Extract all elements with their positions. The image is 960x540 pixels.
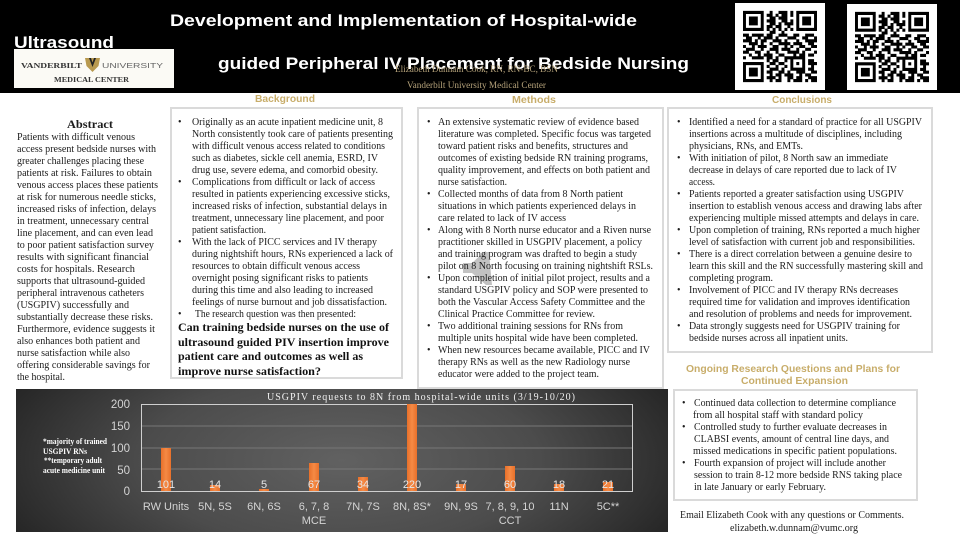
ongoing bullets: in late January or early February. <box>694 482 826 493</box>
affiliation: Vanderbilt University Medical Center <box>407 81 547 91</box>
chart footnote: *majority of trained <box>43 437 107 446</box>
background bullets: With the lack of PICC services and IV therapy <box>192 237 377 248</box>
logo: Vanderbilt University Medical Center: VANDERBILT <box>21 61 82 70</box>
background bullets: • <box>178 177 182 188</box>
plot frame and grid lines <box>141 404 633 492</box>
category labels: MCE <box>302 515 326 527</box>
background bullets: overnight posing significant risks to patients <box>192 273 368 284</box>
conclusions bullets: Patients reported a greater satisfaction using USGPIV <box>689 189 905 200</box>
background bullets: • <box>178 117 182 128</box>
icon: speaker <box>463 252 492 285</box>
abstract text: supports that ultrasound-guided <box>17 276 145 287</box>
conclusions bullets: Data strongly suggests need for USGPIV training for <box>689 321 901 332</box>
background bullets: resulted in patients experiencing excessive sticks, <box>192 189 390 200</box>
abstract text: at risk for numerous needle sticks, <box>17 192 156 203</box>
category labels: 5N, 5S <box>198 501 232 513</box>
conclusions bullets: • <box>677 249 681 260</box>
methods bullets: An extensive systematic review of evidence based <box>438 117 639 128</box>
value labels: 5 <box>261 479 267 491</box>
research question <box>178 320 390 378</box>
research question: improve nurse satisfaction? <box>178 364 321 378</box>
ongoing bullets: • <box>682 458 686 469</box>
conclusions bullets: • <box>677 225 681 236</box>
research question: patient care and outcomes as well as <box>178 349 363 363</box>
methods bullets: toward patient risks and benefits, structures and <box>438 141 628 152</box>
value labels: 14 <box>209 479 221 491</box>
methods bullets <box>427 117 653 380</box>
ongoing bullets: • <box>682 398 686 409</box>
methods bullets: Clinical Practice Committee for review. <box>438 309 595 320</box>
methods bullets: situations in which patients experienced delays in <box>438 201 636 212</box>
background bullets: feelings of nurse burnout and job dissatisfaction. <box>192 297 387 308</box>
y axis labels: 100 <box>111 443 130 455</box>
abstract text <box>17 132 158 383</box>
category labels: 5C** <box>597 501 620 513</box>
conclusions bullets: bedside nurses across all inpatient units. <box>689 333 848 344</box>
QR code 1 <box>735 3 825 90</box>
background bullets: drug use, severe edema, and comorbid obesity. <box>192 165 378 176</box>
methods bullets: therapy RNs as well as the new Radiology nurse <box>438 357 631 368</box>
title <box>14 11 689 73</box>
y axis labels: 0 <box>124 486 130 498</box>
author line: Elizabeth Dunnam Cook, RN, RN-BC, BSN <box>395 65 558 75</box>
methods bullets: • <box>427 225 431 236</box>
methods bullets: nurse satisfaction. <box>438 177 507 188</box>
category labels: 11N <box>549 501 569 513</box>
panel: ongoing research <box>674 390 917 500</box>
abstract text: line placement, and can even lead <box>17 228 153 239</box>
methods bullets: • <box>427 117 431 128</box>
abstract text: greater challenges placing these <box>17 156 145 167</box>
value labels: 18 <box>553 479 565 491</box>
category labels: 7N, 7S <box>346 501 380 513</box>
abstract text: results with significant financial <box>17 252 149 263</box>
value labels: 34 <box>357 479 369 491</box>
abstract text: the hospital. <box>17 372 65 383</box>
contact email: Email Elizabeth Cook with any questions or Comments. <box>680 510 904 521</box>
conclusions bullets <box>677 117 923 344</box>
title: guided Peripheral IV Placement for Bedside Nursing <box>218 54 689 73</box>
conclusions bullets: insertion to establish venous access and drawing labs after <box>689 201 923 212</box>
abstract text: access present bedside nurses with <box>17 144 156 155</box>
category labels: 6, 7, 8 <box>299 501 329 513</box>
y axis labels: 200 <box>111 399 130 411</box>
logo: Vanderbilt University Medical Center: MEDICAL CENTER <box>54 76 130 84</box>
value labels: 220 <box>403 479 421 491</box>
category labels: 8N, 8S* <box>393 501 432 513</box>
contact email <box>680 510 904 534</box>
category labels: 6N, 6S <box>247 501 281 513</box>
conclusions bullets: level of satisfaction with current job and responsibilities. <box>689 237 915 248</box>
value labels: 21 <box>602 479 614 491</box>
value labels: 17 <box>455 479 467 491</box>
heading: Conclusions: Conclusions <box>772 95 832 106</box>
abstract text: increased risks of infection, delays <box>17 204 156 215</box>
background bullets: patient satisfaction. <box>192 225 266 236</box>
methods bullets: • <box>427 189 431 200</box>
ongoing bullets: Continued data collection to determine compliance <box>694 398 897 409</box>
conclusions bullets: access. <box>689 177 715 188</box>
chart footnote: acute medicine unit <box>43 466 105 475</box>
abstract text: peripheral intravenous catheters <box>17 288 144 299</box>
methods bullets: • <box>427 273 431 284</box>
ongoing bullets <box>682 398 903 493</box>
conclusions bullets: completing program. <box>689 273 773 284</box>
conclusions bullets: physicians, RNs, and EMTs. <box>689 141 803 152</box>
methods bullets: practitioner skilled in USGPIV placement, a policy <box>438 237 642 248</box>
background bullets: treatment, unnecessary line placement, and poor <box>192 213 385 224</box>
conclusions bullets: • <box>677 321 681 332</box>
abstract text: to poor patient satisfaction survey <box>17 240 154 251</box>
conclusions bullets: required time for validation and improves identification <box>689 297 910 308</box>
background bullets: such as diabetes, sickle cell anemia, ESRD, IV <box>192 153 379 164</box>
abstract text: substantially decrease these risks. <box>17 312 153 323</box>
y axis labels: 50 <box>117 465 130 477</box>
research question: Can training bedside nurses on the use of <box>178 320 390 334</box>
abstract text: venous access places these patients <box>17 180 158 191</box>
background bullets: with difficult venous access related to conditions <box>192 141 385 152</box>
background bullets: • <box>178 237 182 248</box>
ongoing bullets: CLABSI events, amount of central line days, and <box>694 434 889 445</box>
abstract text: patients at risk. Failures to obtain <box>17 168 152 179</box>
research question: ultrasound guided PIV insertion improve <box>178 335 390 349</box>
methods bullets: Two additional training sessions for RNs from <box>438 321 623 332</box>
methods bullets: multiple units hospital wide have been completed. <box>438 333 638 344</box>
background bullets: Complications from difficult or lack of access <box>192 177 375 188</box>
background bullets <box>178 117 394 320</box>
conclusions bullets: and resolution of problems and needs for improvement. <box>689 309 912 320</box>
value labels <box>157 479 614 491</box>
methods bullets: quality improvement, and effects on both patient and <box>438 165 650 176</box>
conclusions bullets: • <box>677 117 681 128</box>
conclusions bullets: learn this skill and the RN successfully mastering skill and <box>689 261 923 272</box>
background bullets: resources to obtain difficult venous access <box>192 261 360 272</box>
category labels <box>143 501 620 527</box>
methods bullets: Upon completion of initial pilot project, results and a <box>438 273 651 284</box>
heading: Methods: Methods <box>512 95 556 106</box>
panel: conclusions <box>668 108 932 352</box>
methods bullets: When new resources became available, PICC and IV <box>438 345 651 356</box>
methods bullets: and training program was drafted to begin a study <box>438 249 637 260</box>
conclusions bullets: • <box>677 153 681 164</box>
methods bullets: care related to lack of IV access <box>438 213 566 224</box>
methods bullets: • <box>427 321 431 332</box>
QR code 2 <box>847 4 937 90</box>
background bullets: increased risks of infection, substantial delays in <box>192 201 387 212</box>
heading: ongoing research: Ongoing Research Questions and Plans for <box>686 364 900 375</box>
header band <box>0 0 960 93</box>
logo: Vanderbilt University Medical Center: UNIVERSITY <box>102 61 163 70</box>
methods bullets: educator were added to the project team. <box>438 369 599 380</box>
value labels: 67 <box>308 479 320 491</box>
conclusions bullets: • <box>677 285 681 296</box>
y axis labels <box>111 399 130 498</box>
bars <box>161 404 613 491</box>
chart footnote: **temporary adult <box>44 456 102 465</box>
abstract text: (USGPIV) successfully and <box>17 300 129 311</box>
methods bullets: Along with 8 North nurse educator and a Riven nurse <box>438 225 652 236</box>
abstract text: offering considerable savings for <box>17 360 151 371</box>
background bullets: Originally as an acute inpatient medicine unit, 8 <box>192 117 383 128</box>
contact email: elizabeth.w.dunnam@vumc.org <box>730 523 858 534</box>
title: Ultrasound <box>14 33 114 52</box>
value labels: 60 <box>504 479 516 491</box>
abstract heading: Abstract <box>67 119 113 131</box>
conclusions bullets: Involvement of PICC and IV therapy RNs decreases <box>689 285 898 296</box>
heading: Background: Background <box>255 94 315 105</box>
value labels: 101 <box>157 479 175 491</box>
logo: Vanderbilt University Medical Center <box>14 49 174 88</box>
methods bullets: both the Vascular Access Safety Committee and the <box>438 297 646 308</box>
ongoing bullets: missed medications in specific patient populations. <box>693 446 897 457</box>
heading: ongoing research: Continued Expansion <box>741 376 848 387</box>
ongoing bullets: session to train 8-12 more bedside RNS taking place <box>694 470 903 481</box>
conclusions bullets: experiencing multiple missed attempts and delays in care. <box>689 213 919 224</box>
conclusions bullets: There is a direct correlation between a genuine desire to <box>689 249 912 260</box>
methods bullets: outcomes of existing bedside RN training programs, <box>438 153 648 164</box>
abstract text: in treatment, unnecessary central <box>17 216 149 227</box>
category labels: 7, 8, 9, 10 <box>486 501 534 513</box>
abstract text: nurse satisfaction while also <box>17 348 130 359</box>
chart title: USGPIV requests to 8N from hospital-wide units (3/19-10/20) <box>267 392 575 403</box>
category labels: CCT <box>499 515 522 527</box>
abstract text: costs for hospitals. Research <box>17 264 135 275</box>
conclusions bullets: Identified a need for a standard of practice for all USGPIV <box>689 117 923 128</box>
conclusions bullets: • <box>677 189 681 200</box>
methods bullets: literature was completed. Specific focus was targeted <box>438 129 651 140</box>
panel: methods <box>418 108 663 388</box>
heading: ongoing research <box>686 364 900 387</box>
panel: abstract <box>17 119 158 383</box>
ongoing bullets: Controlled study to further evaluate decreases in <box>694 422 887 433</box>
ongoing bullets: from all hospital staff with standard policy <box>693 410 863 421</box>
chart footnote <box>43 437 107 475</box>
methods bullets: • <box>427 345 431 356</box>
y axis labels: 150 <box>111 421 130 433</box>
title: Development and Implementation of Hospital-wide <box>170 11 637 30</box>
methods bullets: Collected months of data from 8 North patient <box>438 189 623 200</box>
background bullets: • <box>178 309 182 320</box>
conclusions bullets: insertions across a multitude of disciplines, including <box>689 129 902 140</box>
methods bullets: standard USGPIV policy and SOP were presented to <box>438 285 648 296</box>
conclusions bullets: Upon completion of training, RNs reported a much higher <box>689 225 921 236</box>
ongoing bullets: • <box>682 422 686 433</box>
abstract text: Furthermore, evidence suggests it <box>17 324 155 335</box>
panel: background <box>171 108 402 378</box>
category labels: RW Units <box>143 501 190 513</box>
background bullets: during this time and also leading to increased <box>192 285 373 296</box>
ongoing bullets: Fourth expansion of project will include another <box>694 458 887 469</box>
bar chart <box>16 389 668 532</box>
methods bullets: pilot on 8 North focusing on training nightshift RSLs. <box>438 261 653 272</box>
conclusions bullets: With initiation of pilot, 8 North saw an immediate <box>689 153 889 164</box>
chart footnote: USGPIV RNs <box>43 447 87 456</box>
abstract text: Patients with difficult venous <box>17 132 135 143</box>
background bullets: North consistently took care of patients presenting <box>192 129 393 140</box>
category labels: 9N, 9S <box>444 501 478 513</box>
conclusions bullets: decrease in delays of care reported due to lack of IV <box>689 165 898 176</box>
background bullets: The research question was then presented: <box>195 309 356 320</box>
abstract text: also enhances both patient and <box>17 336 140 347</box>
background bullets: during nightshift hours, RNs experienced a lack of <box>192 249 394 260</box>
